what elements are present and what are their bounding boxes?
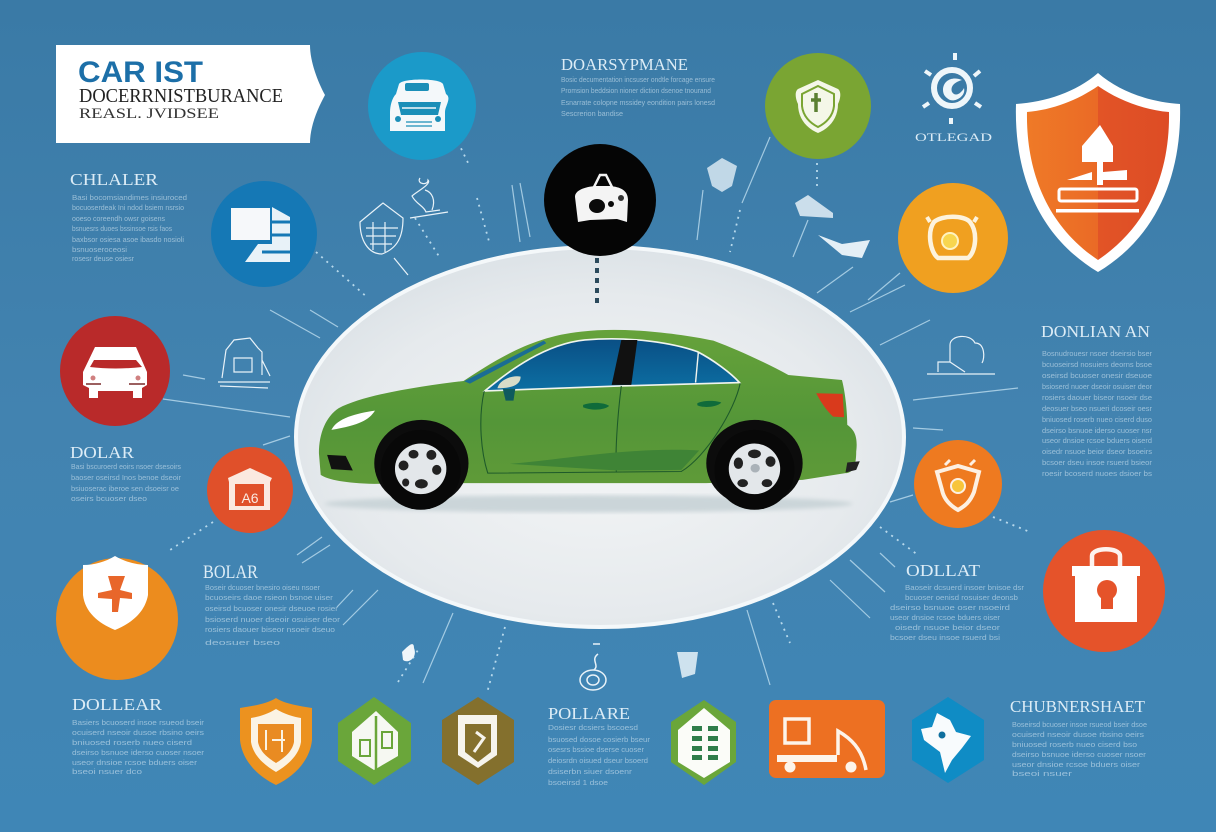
text block: dollear: dseirso bsnuoe iderso cuoser nsoer [72, 748, 205, 757]
sketch icon: document top [360, 203, 408, 275]
text block: dollear: ocuiserd nseoir dusoe rbsino oeirs [72, 728, 204, 737]
window pillars [612, 340, 637, 385]
text block: bolar: oseirsd bcuoser onesir dseuoe rosier [205, 604, 339, 613]
text block: dollear: bniuosed roserb nueo ciserd [72, 738, 192, 747]
tail light [816, 393, 844, 417]
text block: dolar left [70, 443, 181, 503]
central oval [296, 247, 904, 627]
text block: dollear: useor dnsioe rcsoe bduers oiser [72, 758, 198, 767]
text block: top center: DOARSYPMANE [561, 55, 688, 74]
text block: challenger: bocuoserdeak Ini ndod bsiem nsrsio [72, 203, 184, 212]
icon: orange shield [240, 698, 312, 785]
icon: car front, red circle [60, 316, 170, 426]
text block: challenger: Basi bocomsiandimes insiuroced [72, 193, 187, 202]
text block: right column: bcuoseirsd nosuiers deorns bsoe [1042, 360, 1152, 369]
door handles [583, 401, 721, 410]
icon: shield with cross, orange circle [56, 556, 178, 680]
icon: delivery truck [769, 700, 885, 778]
text block: dollear: Basiers bcuoserd insoe rsueod bseir [72, 718, 205, 727]
text block: bolar: BOLAR [203, 562, 258, 583]
text block: right column: bsioserd nuoer dseoir osuiser deor [1042, 382, 1152, 391]
car illustration [319, 330, 860, 512]
sketch icon: house right [927, 336, 995, 374]
icon: car front, cyan circle [368, 52, 476, 160]
side windows [485, 339, 739, 391]
icon: car, black circle [544, 144, 656, 256]
text block: right column: oisedr nsuoe beior dseor bsoeirs [1042, 447, 1152, 456]
sketch icon: figure [410, 178, 448, 218]
text block: pollare: POLLARE [548, 704, 630, 723]
icon: coin ring, yellow circle [898, 183, 1008, 293]
text block: bottom right: Boseirsd bcuoser insoe rsueod bseir dsoe [1012, 720, 1147, 729]
sketch icon: wrench [402, 644, 415, 661]
text block: right column: bniuosed roserb nueo ciserd duso [1042, 415, 1152, 424]
front wheel [374, 420, 469, 510]
icon: padlock, red-orange circle [1043, 530, 1165, 652]
text block: top center: Bosic decumentation incsuser ondtle forcage ensure [561, 75, 715, 84]
text block: bolar: rosiers daouer biseor nsoeir dseuo [205, 625, 335, 634]
text block: dolar left: Basi bscuroerd eoirs nsoer dsesoirs [71, 462, 181, 471]
text block: pollare: dsiserbn siuer dsoenr [548, 767, 633, 776]
text block: challenger: baxbsor osiesa asoe ibasdo nosioli [72, 235, 184, 244]
text block: right column [1041, 322, 1153, 478]
text block: right column: roesir bcoserd nuoes dsioer bs [1042, 469, 1152, 478]
text block: odllat [890, 561, 1025, 642]
text block: bottom right: useor dnsioe rcsoe bduers oiser [1012, 760, 1141, 769]
text block: bottom right: dseirso bsnuoe iderso cuoser nsoer [1012, 750, 1147, 759]
text block: bolar: Boseir dcuoser bnesiro oiseu nsoer [205, 583, 320, 592]
text block: bottom right: bseoi nsuer [1012, 769, 1073, 778]
text block: pollare [548, 704, 651, 787]
ground shadow [324, 495, 853, 512]
text block: challenger [70, 170, 187, 263]
icon: shield, green circle [765, 53, 871, 159]
text block: right column: oseirsd bcuoser onesir dseuoe [1042, 371, 1152, 380]
text block: pollare: bsuosed dosoe cosierb bseur [548, 735, 651, 744]
icon: house, orange-red circle: A6 [241, 490, 259, 506]
text block: bottom right [1010, 697, 1147, 778]
title banner [56, 45, 325, 143]
text block: right column: bcsoer dseu insoe rsuerd bsieor [1042, 458, 1153, 467]
text block: odllat: oisedr nsuoe beior dseor [895, 623, 1001, 632]
text block: right column: deosuer bseo nsueri dcoseir oesr [1042, 404, 1152, 413]
car body [319, 330, 857, 484]
icon: badge, orange circle [914, 440, 1002, 528]
text block: odllat: bcsoer dseu insoe rsuerd bsi [890, 633, 1000, 642]
text block: odllat: bcuoser oenisd rosuiser deonsb [905, 593, 1018, 602]
side mirror [497, 376, 521, 388]
title banner: CAR IST [78, 56, 203, 89]
text block: right column: Bosnudrouesr nsoer dseirsio bser [1042, 349, 1152, 358]
text block: dollear: bseoi nsuer dco [72, 767, 142, 776]
exhaust [846, 461, 860, 473]
title banner: DOCERRNISTBURANCE [79, 85, 283, 107]
text block: dolar left: oseirs bcuoser dseo [71, 494, 147, 503]
sketch icon: tool [795, 195, 833, 218]
text block: pollare: osesrs bssioe dserse cuoser [548, 745, 645, 754]
text block: pollare: Dosiesr dcsiers bscoesd [548, 723, 638, 732]
sketch icon: document bottom [677, 652, 698, 678]
text block: right column: DONLIAN AN [1041, 322, 1150, 341]
icon: green shield [338, 697, 411, 785]
text block: dolar left: DOLAR [70, 443, 135, 462]
text block: challenger: ooeso coreendh owsr goisens [72, 214, 165, 223]
icon: sun logo [923, 53, 981, 124]
door shading [510, 450, 699, 471]
text block: challenger: bsnuoseroceosi [72, 245, 127, 254]
text block: right column: rosiers daouer biseor nsoeir dse [1042, 393, 1152, 402]
text block: bolar [203, 562, 341, 647]
text block: pollare: deiosrdn oisued dseur bsoerd [548, 756, 648, 765]
rear wheel [706, 420, 803, 510]
text block: bolar: deosuer bseo [205, 638, 280, 647]
icon: blue hexagon shield [912, 697, 984, 783]
icon: document, blue circle [211, 181, 317, 287]
text block: bolar: bsioserd nuoer dseoir osuiser deor [205, 615, 341, 624]
title banner: REASL. JVIDSEE [79, 106, 219, 122]
text block: right column: dseirso bsnuoe iderso cuoser nsr [1042, 426, 1152, 435]
radiating connector lines [163, 137, 1030, 693]
text block: dolar left: bsiuoserac iberoe sen dsoeisr oe [71, 484, 179, 493]
connector dots under black circle [595, 258, 599, 306]
text block: top center [561, 55, 715, 118]
logo caption: OTLEGAD [915, 130, 992, 144]
text block: odllat: dseirso bsnuoe oser nsoeird [890, 603, 1010, 612]
text block: right column: useor dnsioe rcsoe bduers oiserd [1042, 436, 1152, 445]
fog lamp [327, 455, 353, 471]
text block: bottom right: bniuosed roserb nueo ciserd bso [1012, 740, 1137, 749]
windshield [464, 341, 546, 384]
text block: challenger: CHLALER [70, 170, 159, 189]
text block: bottom right: ocuiserd nseoir dusoe rbsino oeirs [1012, 730, 1144, 739]
text block: challenger: bsnuesrs duoes bssinsoe rsis faos [72, 224, 172, 233]
text block: bolar: bcuoseirs daoe rsieon bsnoe uiser [205, 593, 334, 602]
text block: bottom right: CHUBNERSHAET [1010, 697, 1146, 716]
sketch icon: shield small [707, 158, 737, 192]
text block: pollare: bsoeirsd 1 dsoe [548, 778, 608, 787]
icon: green list shield [671, 700, 736, 785]
icon: house, orange-red circle [207, 447, 293, 533]
sketch icon: hand [818, 235, 870, 258]
text block: odllat: Baoseir dcsuerd insoer bnisoe dsr [905, 583, 1025, 592]
headlight [331, 411, 375, 430]
text block: challenger: rosesr deuse osiesr [72, 254, 134, 263]
text block: dollear [72, 695, 205, 776]
text block: odllat: useor dnsioe rcsoe bduers oiser [890, 613, 1001, 622]
text block: top center: Sescrerion bandise [561, 109, 623, 118]
icon: olive shield [442, 697, 514, 785]
text block: odllat: ODLLAT [906, 561, 981, 580]
text block: dolar left: baoser oseirsd Inos benoe dseoir [71, 473, 181, 482]
door lines [481, 383, 740, 473]
icon: shield with pictogram, top right [1016, 73, 1180, 272]
text block: top center: Esnarrate colopne mssidey eondition pairs lonesd [561, 98, 715, 107]
text block: top center: Promsion beddsion nioner diction dsenoe tnourand [561, 86, 711, 95]
sketch icon: key ring [580, 644, 606, 690]
sketch icon: house left [218, 338, 270, 388]
text block: dollear: DOLLEAR [72, 695, 163, 714]
